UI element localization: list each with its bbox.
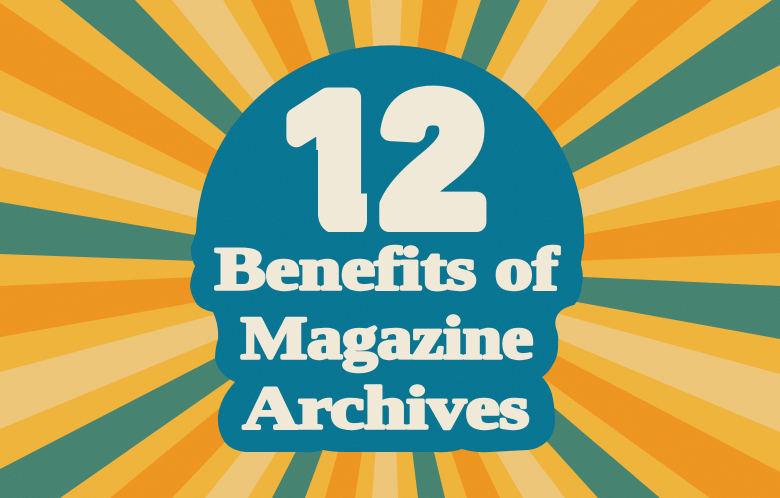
headline line 2: Magazine xyxy=(241,305,533,371)
numeral 12 xyxy=(275,59,484,261)
digit 2: 2 xyxy=(383,59,484,261)
headline line 1: Benefits of xyxy=(215,236,559,302)
blue dome badge xyxy=(190,45,584,452)
headline xyxy=(215,236,559,441)
headline line 3: Archives xyxy=(243,375,529,441)
digit 1: 1 xyxy=(284,59,385,261)
trim of digit foot xyxy=(275,150,398,240)
